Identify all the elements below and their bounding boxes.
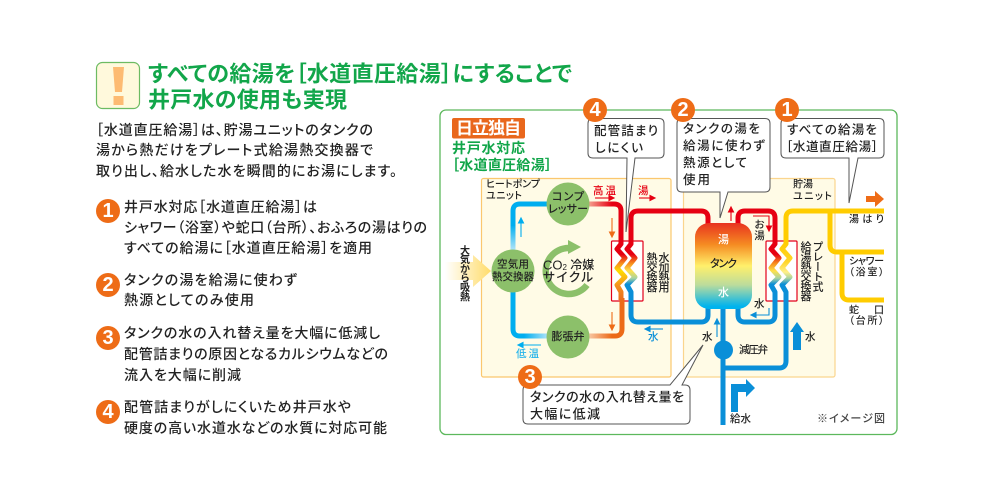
flow labels: 高温 [593,184,616,197]
callout 4: 配管詰まり [594,123,658,138]
storage unit label: 貯湯 [793,178,813,190]
flow labels: 水 [702,330,713,343]
callout 1: ［水道直圧給湯］ [786,139,878,154]
heat pump unit label: ヒートポンプ [486,178,540,190]
point 2: タンクの湯を給湯に使わず [124,272,298,288]
storage unit label: ユニット [793,192,832,202]
intro text: 取り出し、給水した水を瞬間的にお湯にします。 [96,163,397,179]
flow labels: 水 [805,330,816,343]
flow labels: 給水 [730,412,752,425]
exchanger labels: 水加熱用 [657,251,670,293]
compressor: レッサー [548,202,588,216]
callout 4: 4 [589,99,601,121]
arrow: bath outlet direction [866,191,884,207]
compressor [546,182,590,226]
pressure reducing valve [714,340,768,360]
callout 1: すべての給湯を [787,122,877,137]
tank: 湯 [718,232,729,246]
point 1 [96,199,427,256]
point 3 [96,325,388,383]
exchanger labels: 給湯熱交換器 [799,240,812,302]
CO2 refrigerant cycle: 冷媒 [567,257,594,272]
exchanger labels: 熱交換器 [645,252,658,293]
outlet labels [849,214,884,327]
point 3: 3 [102,327,114,349]
badge: 日立独自: 日立独自 [456,118,521,138]
outlet labels: 湯はり [849,214,884,226]
flow labels [516,184,816,425]
storage unit label [793,178,832,202]
callout 1: 1 [781,99,793,121]
tank: タンク [709,257,737,270]
point 2: 2 [102,274,114,296]
point 4: 硬度の高い水道水などの水質に対応可能 [124,420,387,436]
arrow: heat absorbed from air: 大気から吸熱 [458,244,470,302]
panel heading [452,140,552,173]
CO2 refrigerant cycle [543,240,594,294]
callout 3: タンクの水の入れ替え量を [530,390,684,404]
callout 3: 3 [524,366,536,388]
arrow: water going up [790,322,804,350]
title: すべての給湯を［水道直圧給湯］にすることで [148,62,572,86]
intro text: ［水道直圧給湯］は、貯湯ユニットのタンクの [96,122,373,138]
callout 3: 大幅に低減 [530,406,600,422]
panel heading: ［水道直圧給湯］ [452,157,552,173]
heat exchanger boxes [612,241,797,301]
heat pump unit label [486,178,540,202]
heat pump unit label: ユニット [486,191,522,202]
point 4: 4 [102,401,114,423]
flow labels: お湯 [753,219,765,241]
point 1: 1 [102,200,114,222]
flow labels: 低温 [516,347,540,360]
flow arrows [518,196,772,348]
callout 2: 熱源として [683,156,747,170]
point 1: 井戸水対応［水道直圧給湯］は [124,199,317,215]
air heat exchanger: 熱交換器 [492,270,534,283]
point 3: 流入を大幅に削減 [124,367,241,383]
intro text [96,122,397,179]
expansion valve [546,316,590,358]
callout 1 [775,98,884,203]
flow labels: 水 [648,330,659,343]
expansion valve: 膨張弁 [552,329,584,343]
intro text: 湯から熱だけをプレート式給湯熱交換器で [96,142,374,158]
panel: storage unit [684,178,835,377]
tank [695,223,752,309]
warning icon [96,62,140,108]
flow labels: 湯 [638,184,649,197]
air heat exchanger [492,250,534,292]
exchanger labels: プレート式 [811,241,824,292]
callout 2 [671,98,770,218]
callout 4 [583,98,664,232]
point 2: 熱源としてのみ使用 [124,292,254,308]
flow labels: 水 [754,297,765,310]
hot and cold water pipes [627,211,884,425]
callout 2: 給湯に使わず [683,138,765,153]
panel: system diagram frame [440,110,897,434]
point 4 [96,399,387,436]
panel heading: 井戸水対応 [452,140,525,156]
callout 2: 2 [677,99,689,121]
arrow: water supply [731,379,755,412]
point 1: すべての給湯に［水道直圧給湯］を適用 [124,240,372,256]
outlet labels: （台所） [849,314,884,327]
pressure reducing valve: 減圧弁 [739,343,768,356]
outlet labels: 蛇 口 [849,304,884,316]
air heat exchanger: 空気用 [497,258,529,270]
compressor: コンプ [552,190,584,203]
CO2 refrigerant cycle: 2 [562,262,568,272]
outlet labels: シャワー [849,256,884,268]
CO2 refrigerant cycle: CO [543,258,562,272]
panel: heat pump unit [482,178,671,377]
callout 4: しにくい [595,141,643,155]
title [148,62,572,112]
callout 2: タンクの湯を [682,121,760,136]
point 2 [96,272,298,308]
outlet labels: （浴室） [849,266,884,278]
CO2 refrigerant cycle: サイクル [543,270,593,284]
title: 井戸水の使用も実現 [148,88,347,112]
arrow: heat absorbed from air [445,244,491,302]
tank: 水 [718,285,729,299]
image note: ※イメージ図 [817,412,885,425]
point 1: シャワー（浴室）や蛇口（台所）、おふろの湯はりの [124,220,427,236]
refrigerant pipes [513,204,625,336]
exchanger labels [645,240,824,302]
point 3: タンクの水の入れ替え量を大幅に低減し [124,325,380,341]
callout 2: 使用 [683,172,710,187]
point 4: 配管詰まりがしにくいため井戸水や [124,399,351,415]
point 3: 配管詰まりの原因となるカルシウムなどの [124,346,388,362]
callout 3 [518,345,703,424]
